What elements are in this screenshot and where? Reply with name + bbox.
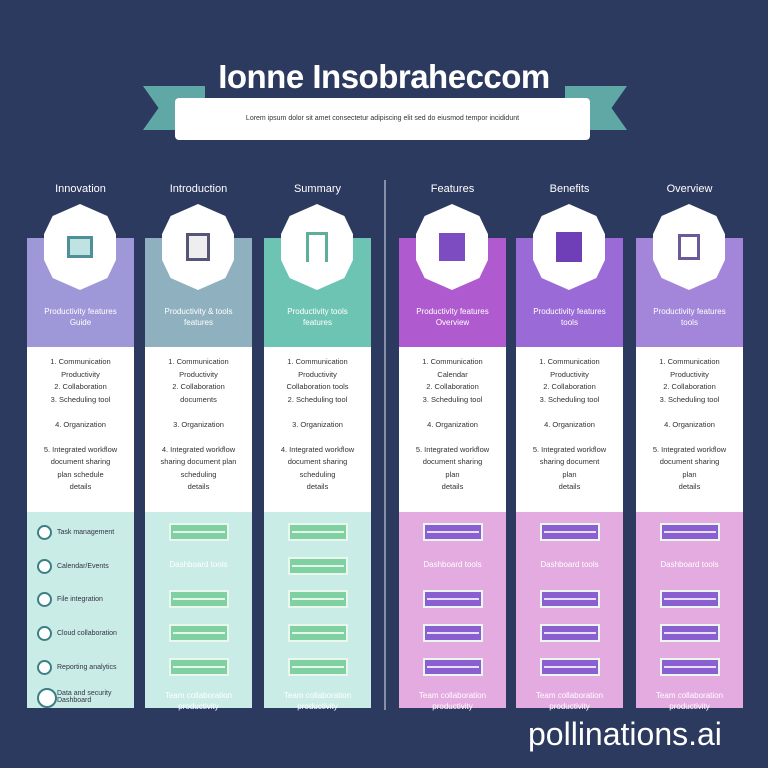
column 4: 5. Integrated workflow [416,444,489,454]
column 6: details [679,482,700,491]
column 3: Productivity [298,370,337,378]
text: Innovation [55,183,106,195]
column 2: 4. Integrated workflow [162,444,235,454]
column 3: Collaboration tools [286,382,349,391]
column 1: Dashboard [57,697,91,704]
column 5: productivity [549,702,590,711]
column 2 [145,183,252,711]
column 1: Task management [57,529,114,536]
column 5 [516,183,623,711]
column 6: productivity [669,702,710,711]
column 4: 2. Collaboration [426,382,479,391]
column 6: document sharing [660,457,719,466]
column 5: Productivity features [533,307,606,316]
column 1: Productivity features [44,307,117,316]
column 2: Dashboard tools [169,560,228,569]
column 1: Guide [70,318,91,327]
column 1: 5. Integrated workflow [44,444,117,454]
text: Benefits [550,183,589,195]
text: Summary [294,183,341,195]
column 3: Productivity tools [287,307,348,316]
column 6: 5. Integrated workflow [653,444,726,454]
column 2: Productivity [179,370,218,378]
column 4: Productivity features [416,307,489,316]
column 3 [264,183,371,711]
column 3: document sharing [288,457,347,466]
column 1: plan schedule [57,470,104,478]
column 3: productivity [297,702,338,711]
column 6: tools [681,318,698,327]
column 1: Calendar/Events [57,563,109,570]
column 3: 2. Scheduling tool [288,394,347,404]
column 2: 3. Organization [173,420,224,428]
column 5: Dashboard tools [540,560,599,569]
column 4: 4. Organization [427,420,478,428]
title: Ionne Insobraheccom [218,58,550,95]
column 4: details [442,482,463,491]
column 6: plan [682,470,697,478]
column 1: 4. Organization [55,420,106,428]
column 5: Productivity [550,370,589,378]
column 4: Calendar [437,370,468,378]
column 1: document sharing [51,457,110,466]
column 3: details [307,482,328,491]
column 1: Data and security [57,690,111,697]
column 5: 2. Collaboration [543,382,596,391]
column 5: 1. Communication [539,357,600,366]
column 2: Productivity & tools [164,307,233,316]
column 1: 3. Scheduling tool [51,394,110,404]
column 4: document sharing [423,457,482,466]
icon [162,204,234,290]
column 2: features [184,318,213,327]
icon [281,204,353,290]
column 2: productivity [178,702,219,711]
text: Introduction [170,183,227,195]
text: Overview [667,183,712,195]
column 6: Team collaboration [656,691,723,700]
column 1 [27,183,134,708]
column 5: 4. Organization [544,420,595,428]
column 5: 3. Scheduling tool [540,394,599,404]
icon [44,204,116,290]
column 6: Dashboard tools [660,560,719,569]
column 3: 3. Organization [292,420,343,428]
watermark: pollinations.ai [528,716,722,752]
column 1: 2. Collaboration [54,382,107,391]
column 5: Team collaboration [536,691,603,700]
column 4: Dashboard tools [423,560,482,569]
column 6: 3. Scheduling tool [660,394,719,404]
column 4: 3. Scheduling tool [423,394,482,404]
column 6: 2. Collaboration [663,382,716,391]
divider [384,180,386,710]
column 5: details [559,482,580,491]
column 4: 1. Communication [422,357,483,366]
column 3: features [303,318,332,327]
column 2: Team collaboration [165,691,232,700]
column 3: 1. Communication [287,357,348,366]
column 2: sharing document plan [161,457,236,466]
column 5: tools [561,318,578,327]
icon [416,204,488,290]
column 2: details [188,482,209,491]
column 6: 4. Organization [664,420,715,428]
column 6: 1. Communication [659,357,720,366]
icon [653,204,725,290]
text: Features [431,183,474,195]
ribbon banner [143,86,627,140]
column 4: Team collaboration [419,691,486,700]
subtitle box [175,98,590,140]
column 5: sharing document [540,457,599,466]
column 4: productivity [432,702,473,711]
column 1: Cloud collaboration [57,630,117,637]
column 3: 4. Integrated workflow [281,444,354,454]
icon [533,204,605,290]
column 3: Team collaboration [284,691,351,700]
column 4 [399,183,506,711]
column 4: Overview [436,318,469,327]
column 1: Reporting analytics [57,664,117,671]
column 2: documents [180,394,217,404]
column 2: 1. Communication [168,357,229,366]
column 6 [636,183,743,711]
column 1: File integration [57,596,103,603]
column 5: plan [562,470,577,478]
column 4: plan [445,470,460,478]
subtitle box: Lorem ipsum dolor sit amet consectetur adipiscing elit sed do eiusmod tempor incididunt [246,115,519,122]
column 5: 5. Integrated workflow [533,444,606,454]
column 6: Productivity [670,370,709,378]
column 1: Productivity [61,370,100,378]
column 6: Productivity features [653,307,726,316]
column 2: scheduling [181,470,216,478]
column 3: scheduling [300,470,335,478]
column 2: 2. Collaboration [172,382,225,391]
column 1: 1. Communication [50,357,111,366]
column 1: details [70,482,91,491]
